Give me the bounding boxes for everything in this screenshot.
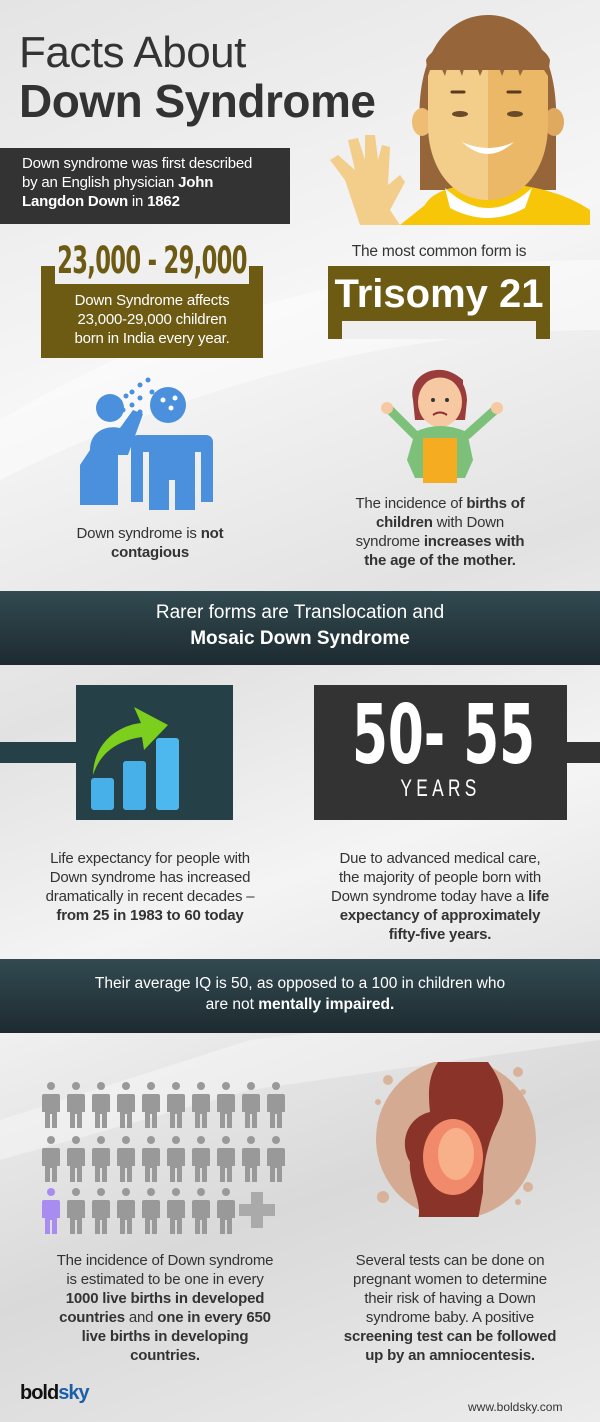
band: IQ [0,959,600,1033]
most common form: Trisomy 21: Trisomy 21 [334,272,544,316]
icon: rising chart [76,685,233,820]
intro box: Down syndrome was first described [22,155,252,172]
stat: 50-55 years: 50- 55 [352,688,535,783]
band: rarer forms: Mosaic Down Syndrome [190,628,410,649]
text: screening tests: Several tests can be done on [356,1252,544,1269]
text: screening tests: screening test can be followed [344,1328,556,1345]
text: screening tests: pregnant women to determine [353,1271,547,1288]
text: fifty-five years: expectancy of approximately [340,907,540,924]
text: fifty-five years [331,850,549,943]
text: fifty-five years: Due to advanced medical care, [340,850,540,867]
text: not contagious: contagious [111,544,189,561]
icon: pregnant woman [375,1062,536,1217]
band: rarer forms [0,591,600,665]
text: life expectancy increased: dramatically in recent decades – [46,888,254,905]
stat: 23,000 - 29,000 [41,239,263,358]
text: screening tests: syndrome baby. A positive [366,1309,534,1326]
title: Down Syndrome [19,75,375,127]
intro box: Langdon Down in 1862 [22,193,180,210]
text: age of mother: children with Down [376,514,504,531]
text: incidence: countries. [130,1347,200,1364]
text: incidence: 1000 live births in developed [66,1290,264,1307]
icon grid: people [42,1082,285,1234]
text: screening tests: their risk of having a Down [364,1290,536,1307]
illustration: girl waving [330,15,590,225]
footer url: www.boldsky.com [468,1400,562,1414]
text: screening tests [344,1252,556,1364]
text: age of mother: The incidence of births of [355,495,525,512]
text: fifty-five years: the majority of people born with [339,869,541,886]
text: incidence: live births in developing [82,1328,248,1345]
band: rarer forms: Rarer forms are Translocation and [156,602,444,623]
text: life expectancy increased: from 25 in 1983 to 60 today [56,907,244,924]
logo: boldsky: boldsky [20,1382,89,1404]
text: not contagious: Down syndrome is not [77,525,223,542]
title [19,28,375,127]
stat: 23,000 - 29,000: 23,000 - 29,000 [57,239,247,282]
connector bars [0,742,80,763]
text: age of mother: syndrome increases with [356,533,524,550]
text: incidence: countries and one in every 650 [59,1309,271,1326]
text: incidence: The incidence of Down syndrome [57,1252,273,1269]
text: fifty-five years: Down syndrome today have a life [331,888,549,905]
stat: 23,000 - 29,000: born in India every year. [74,330,230,347]
icon: worried mother [381,370,503,483]
text: screening tests: up by an amniocentesis. [365,1347,535,1364]
text: incidence [57,1252,273,1364]
stat: 50-55 years: YEARS [400,775,481,802]
band: IQ: Their average IQ is 50, as opposed to a 100 in children who [95,975,505,992]
text: age of mother: the age of the mother. [364,552,516,569]
text: incidence: is estimated to be one in every [66,1271,264,1288]
title: Facts About [19,28,246,77]
intro box [0,148,290,224]
stat: 23,000 - 29,000: 23,000-29,000 children [77,311,227,328]
icon: not contagious [80,378,213,510]
text: life expectancy increased: Life expectancy for people with [50,850,250,867]
stat: 23,000 - 29,000: Down Syndrome affects [75,292,229,309]
band: IQ: are not mentally impaired. [206,996,394,1013]
stat: 50-55 years [314,685,567,820]
text: age of mother [355,495,525,569]
text: life expectancy increased: Down syndrome has increased [50,869,250,886]
intro box: by an English physician John [22,174,213,191]
text: life expectancy increased [46,850,255,924]
most common form: Trisomy 21 [328,243,550,339]
text: not contagious [77,525,224,561]
text: fifty-five years: fifty-five years. [389,926,491,943]
most common form: Trisomy 21: The most common form is [352,243,526,260]
